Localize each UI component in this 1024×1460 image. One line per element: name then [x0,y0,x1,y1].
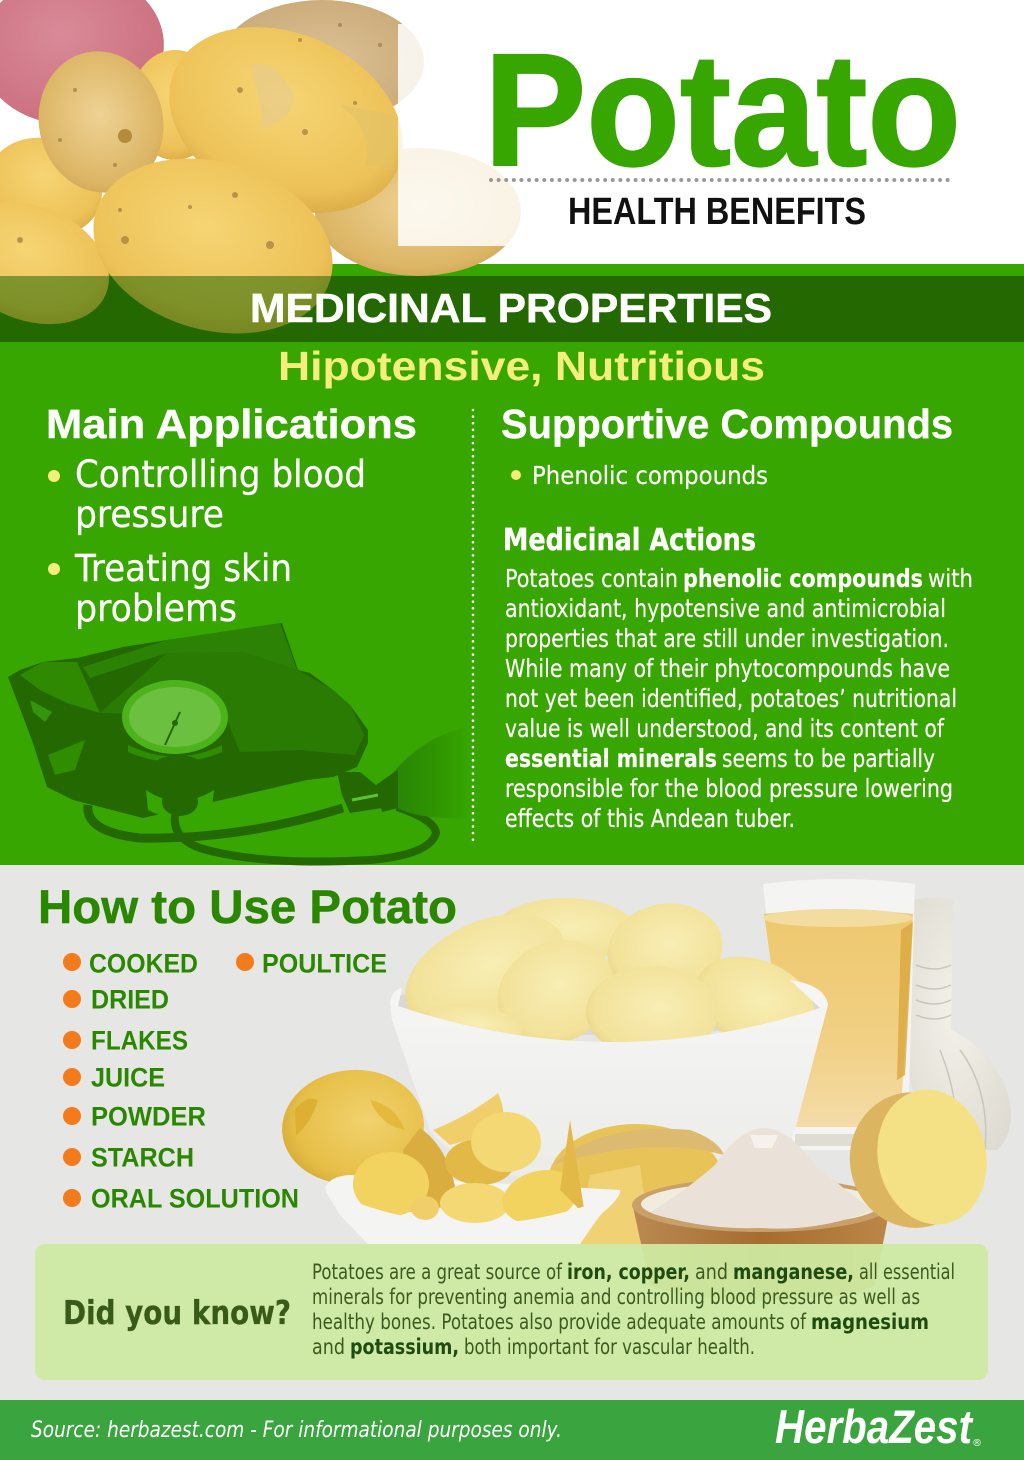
did you know text: iron, copper, [567,1260,690,1284]
panel background [35,1244,988,1380]
list: forms of use: ORAL SOLUTION [91,1184,299,1214]
heading: main applications: Main Applications [46,401,417,447]
photo: peeled potato [548,1124,724,1244]
medicinal section background [0,264,1024,865]
photo: bowl of boiled potatoes [387,891,828,1185]
list: main applications: Treating skin [74,547,292,590]
list: forms of use: JUICE [91,1062,165,1092]
photo: whole potato [277,1064,429,1190]
photo: pile of potatoes [0,0,521,360]
title: Potato [484,20,961,199]
list: forms of use: POULTICE [262,948,387,978]
photo: bowl of potato chips [325,1093,620,1244]
medicinal properties band base [0,276,1024,342]
list: forms of use: STARCH [91,1142,194,1172]
paragraph: medicinal actions: effects of this Andean tuber. [505,804,795,833]
did you know text [312,1260,955,1359]
source note: Source: herbazest.com - For informational purposes only. [31,1418,562,1443]
did you know panel [35,1244,988,1380]
illustration: blood pressure cuff [8,623,470,862]
list: main applications: pressure [75,493,224,536]
did you know text: all essential [859,1260,955,1284]
heading: medicinal actions: Medicinal Actions [503,523,756,558]
did you know text: and [695,1260,728,1284]
footer [0,1400,1024,1460]
vertical dotted divider [472,410,474,842]
footer bar [0,1400,1024,1460]
did you know text: healthy bones. Potatoes also provide adequate amounts of [312,1310,806,1334]
how to use section background [0,865,1024,1400]
did you know heading: Did you know? [63,1293,291,1332]
list: supportive compounds: Phenolic compounds [532,461,768,490]
photo: poultice bundle [900,898,1011,1150]
list: forms of use [63,948,387,1214]
did you know text: both important for vascular health. [464,1335,755,1359]
paragraph: medicinal actions: essential minerals [505,744,717,773]
heading: supportive compounds: Supportive Compounds [501,401,953,447]
paragraph: medicinal actions: phenolic compounds [683,564,923,593]
list: forms of use: FLAKES [91,1026,188,1056]
photo: wooden bowl of potato starch [632,1128,890,1300]
list: main applications [48,453,366,630]
paragraph: medicinal actions [505,564,973,833]
logo: ® [972,1438,982,1449]
did you know text: Potatoes are a great source of [312,1260,562,1284]
subtitle: HEALTH BENEFITS [568,191,866,233]
heading: how to use: How to Use Potato [38,880,457,933]
list: forms of use: POWDER [91,1102,206,1132]
did you know text: potassium, [350,1335,459,1359]
photo wash: translucent white panel behind title [398,24,1024,246]
properties line: Hipotensive, Nutritious [278,343,765,389]
list: forms of use: DRIED [91,984,169,1014]
paragraph: medicinal actions: seems to be partially [722,744,935,773]
list: main applications: problems [75,587,237,630]
did you know text: magnesium [811,1310,929,1334]
list: main applications: Controlling blood [75,453,366,496]
photo: halved potato [837,1079,999,1240]
list: forms of use: COOKED [89,948,198,978]
did you know text: manganese, [733,1260,854,1284]
band overlay over potatoes [0,276,1024,342]
dotted divider [491,178,950,182]
paragraph: medicinal actions: Potatoes contain [505,564,678,593]
header background [0,0,1024,264]
logo: HerbaZest [775,1400,974,1453]
band heading: MEDICINAL PROPERTIES [250,285,772,331]
photo: glass of potato juice [763,879,915,1150]
did you know text: and [312,1335,345,1359]
paragraph: medicinal actions: with [928,564,973,593]
